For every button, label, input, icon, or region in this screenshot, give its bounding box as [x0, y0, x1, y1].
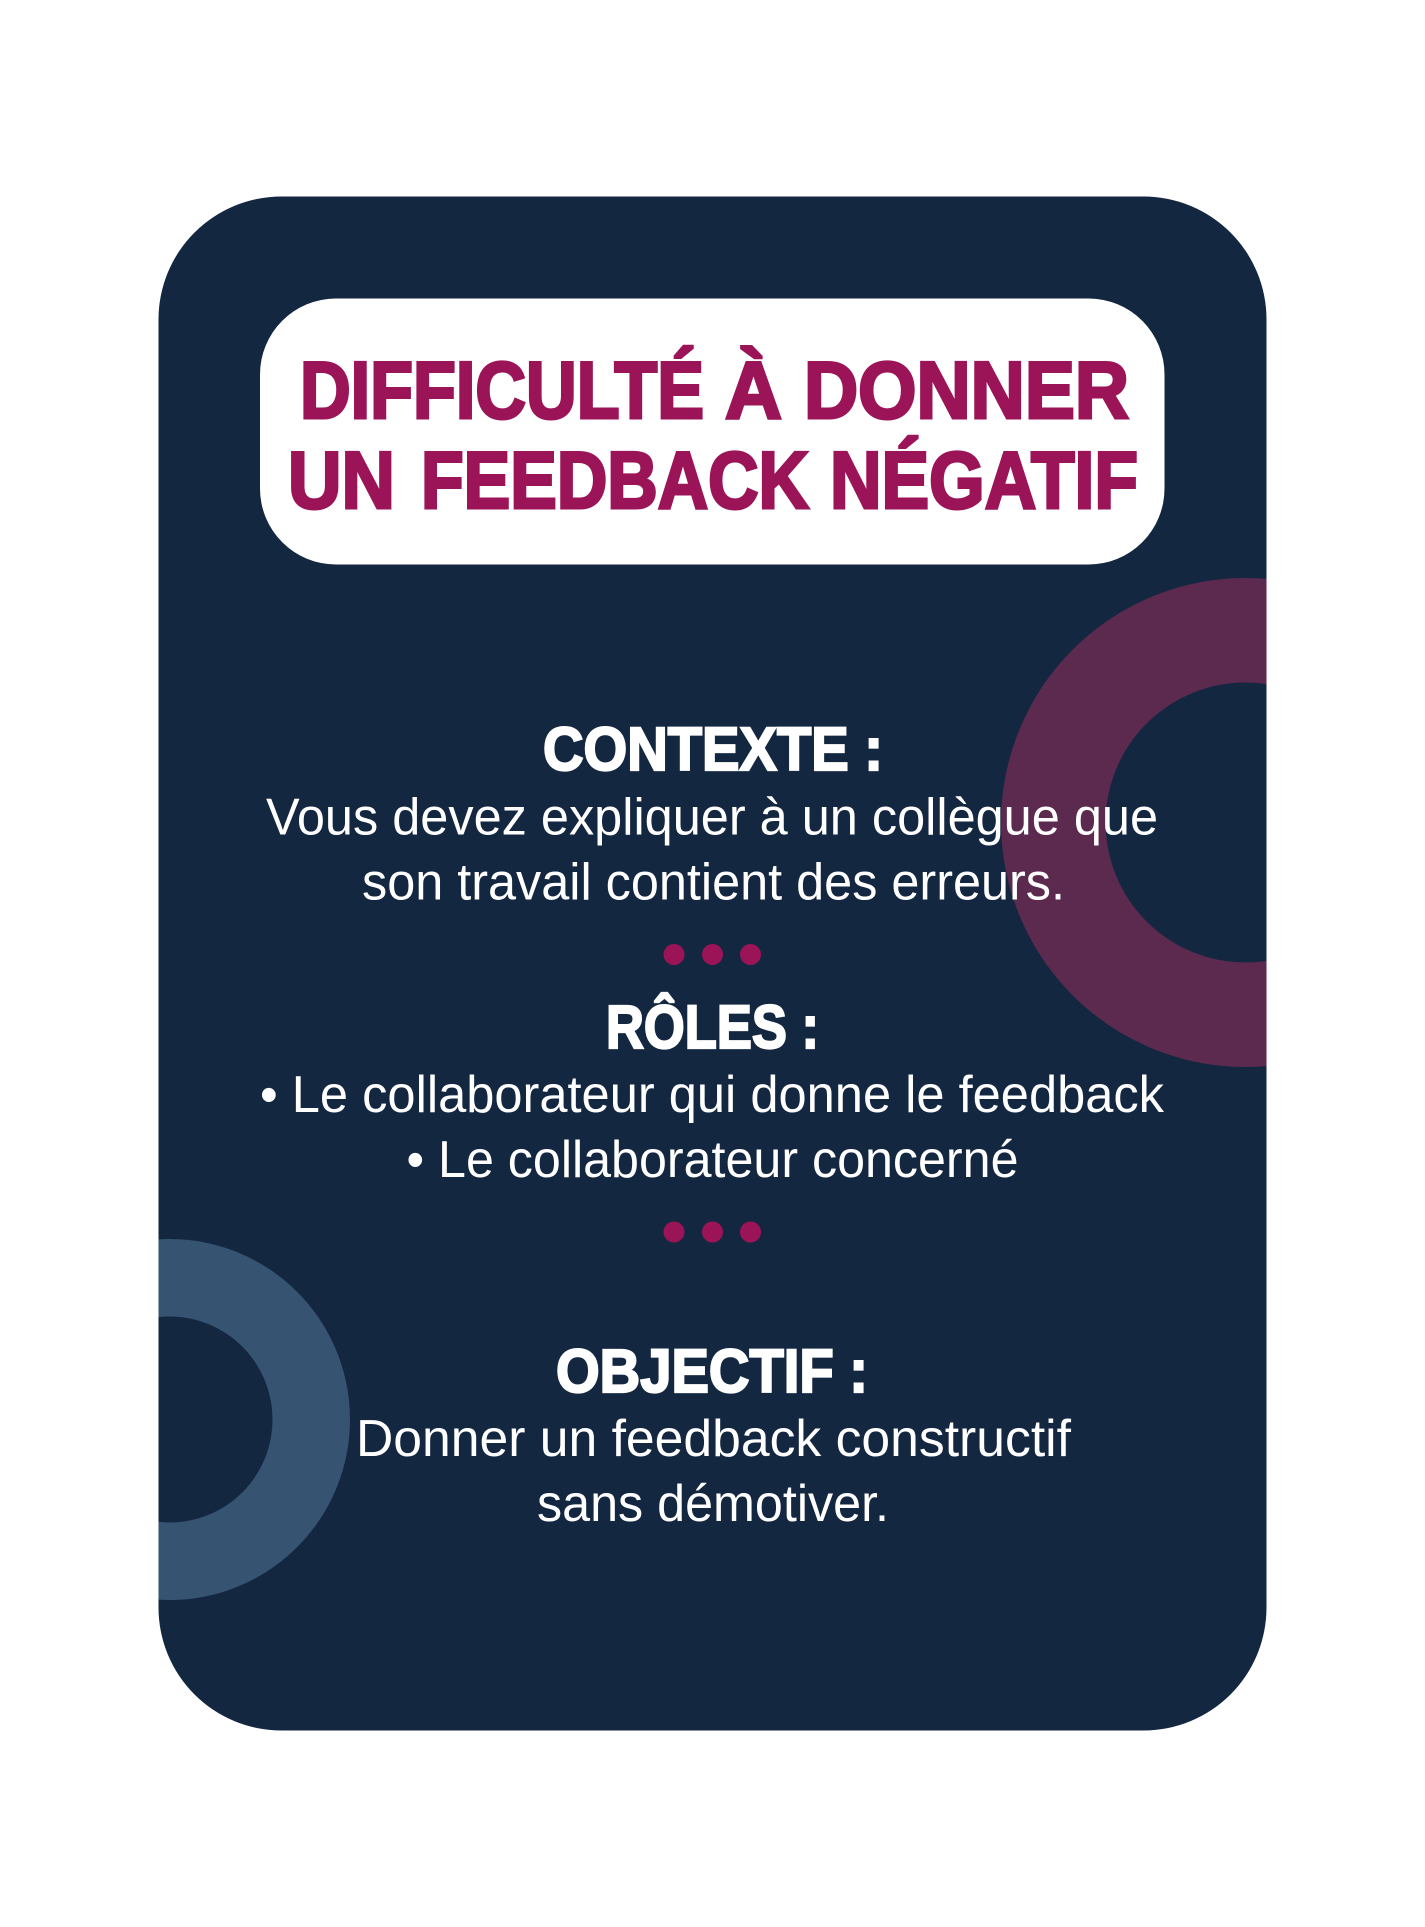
- divider dots 2: [664, 1222, 761, 1242]
- title panel: [260, 298, 1164, 564]
- text: rôles line 2: • Le collaborateur concerné: [406, 1131, 1018, 1189]
- title line 2: FEEDBACK: [421, 436, 809, 526]
- title line 2: [288, 435, 1138, 526]
- text: rôles line 1: • Le collaborateur qui donne le feedback: [260, 1066, 1165, 1124]
- heading: rôles: RÔLES :: [606, 993, 819, 1061]
- section: rôles: [260, 993, 1165, 1189]
- decorative ring: burgundy right: [1053, 630, 1425, 1015]
- heading: objectif: OBJECTIF :: [556, 1337, 868, 1405]
- text: contexte line 1: Vous devez expliquer à un collègue que: [266, 788, 1158, 846]
- title line 1: À: [725, 346, 782, 436]
- title line 2: UN: [288, 436, 395, 526]
- infographic card: [158, 196, 1266, 1730]
- section: contexte: [266, 715, 1158, 912]
- title line 1: [300, 345, 1129, 436]
- heading: contexte: CONTEXTE :: [543, 715, 883, 783]
- title line 1: DONNER: [804, 346, 1129, 436]
- title line 1: DIFFICULTÉ: [300, 345, 704, 436]
- decorative ring: blue left: [158, 1239, 350, 1600]
- text: contexte line 2: son travail contient des erreurs.: [362, 854, 1065, 912]
- title line 2: NÉGATIF: [830, 435, 1138, 526]
- panel: navy card background: [158, 196, 1266, 1730]
- text: objectif line 1: Donner un feedback constructif: [356, 1410, 1072, 1468]
- text: objectif line 2: sans démotiver.: [537, 1475, 889, 1533]
- section: objectif: [356, 1337, 1072, 1533]
- divider dots 1: [664, 944, 761, 965]
